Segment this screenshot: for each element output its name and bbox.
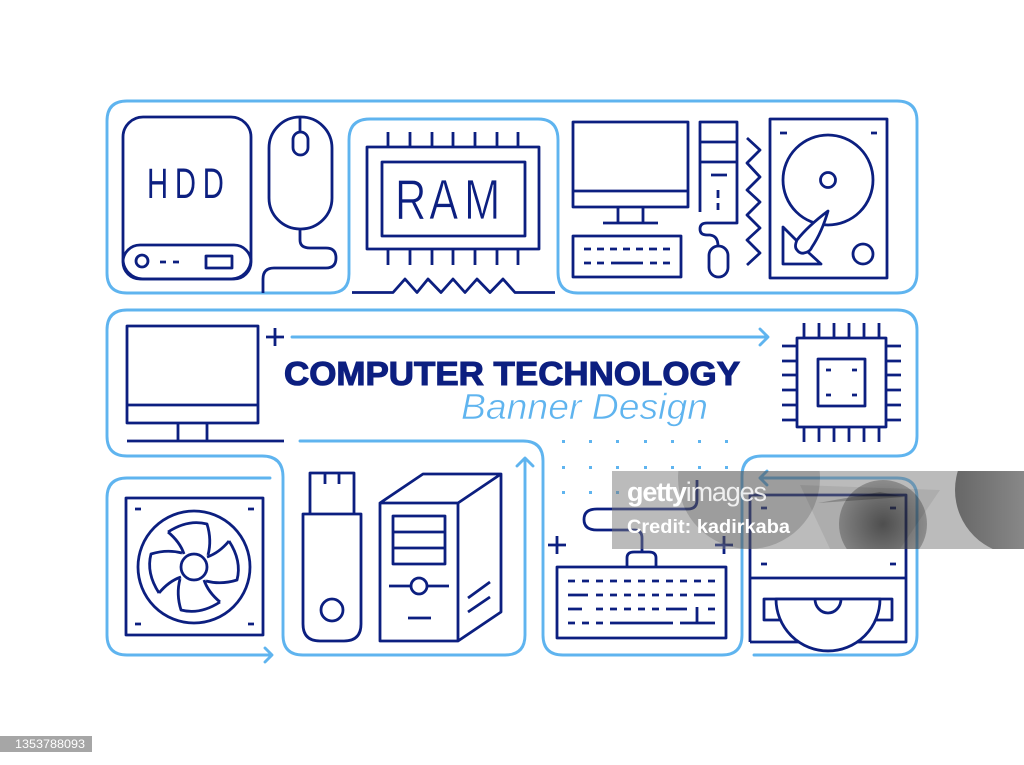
- icon: cooling fan: [126, 498, 263, 635]
- icon: RAM chip: [367, 132, 539, 265]
- panel outline: middle and lower cells: [107, 310, 917, 655]
- icon: optical disc drive: [750, 495, 906, 651]
- watermark banner: [612, 471, 1024, 549]
- icon: plus sign right of keyboard: [715, 536, 733, 554]
- label: RAM: RAM: [395, 167, 500, 231]
- icon: desktop computer set: [573, 122, 737, 277]
- arrow: up into middle panel: [517, 458, 533, 466]
- icon: monitor: [127, 326, 284, 441]
- icon: mouse: [263, 117, 336, 293]
- decorative zigzag line under RAM: [352, 279, 555, 292]
- title: COMPUTER TECHNOLOGY: [284, 356, 740, 393]
- image id text: 1353788093: [15, 737, 85, 751]
- icon: computer tower: [380, 474, 501, 641]
- decorative vertical zigzag: [747, 138, 760, 265]
- icon: USB flash drive: [303, 473, 361, 641]
- label: HDD: HDD: [147, 159, 224, 207]
- arrow: title top line: [292, 329, 768, 345]
- panel outline: fan cell with arrow: [107, 478, 272, 662]
- panel outline: top row: [107, 101, 917, 293]
- icon: keyboard with cable: [557, 480, 726, 638]
- icon: CPU: [782, 323, 901, 442]
- subtitle: Banner Design: [461, 386, 708, 427]
- icon: plus sign: [266, 328, 284, 346]
- panel outline: optical drive cell with arrow: [754, 471, 917, 655]
- decorative dot grid: [562, 440, 728, 494]
- watermark credit text: Credit: kadirkaba: [627, 516, 790, 538]
- image id tag: [0, 736, 92, 752]
- icon: plus sign left of keyboard: [548, 536, 566, 554]
- icon: hard drive: [770, 119, 887, 278]
- watermark logo text: gettyimages: [627, 477, 767, 507]
- icon: HDD enclosure: [123, 117, 251, 279]
